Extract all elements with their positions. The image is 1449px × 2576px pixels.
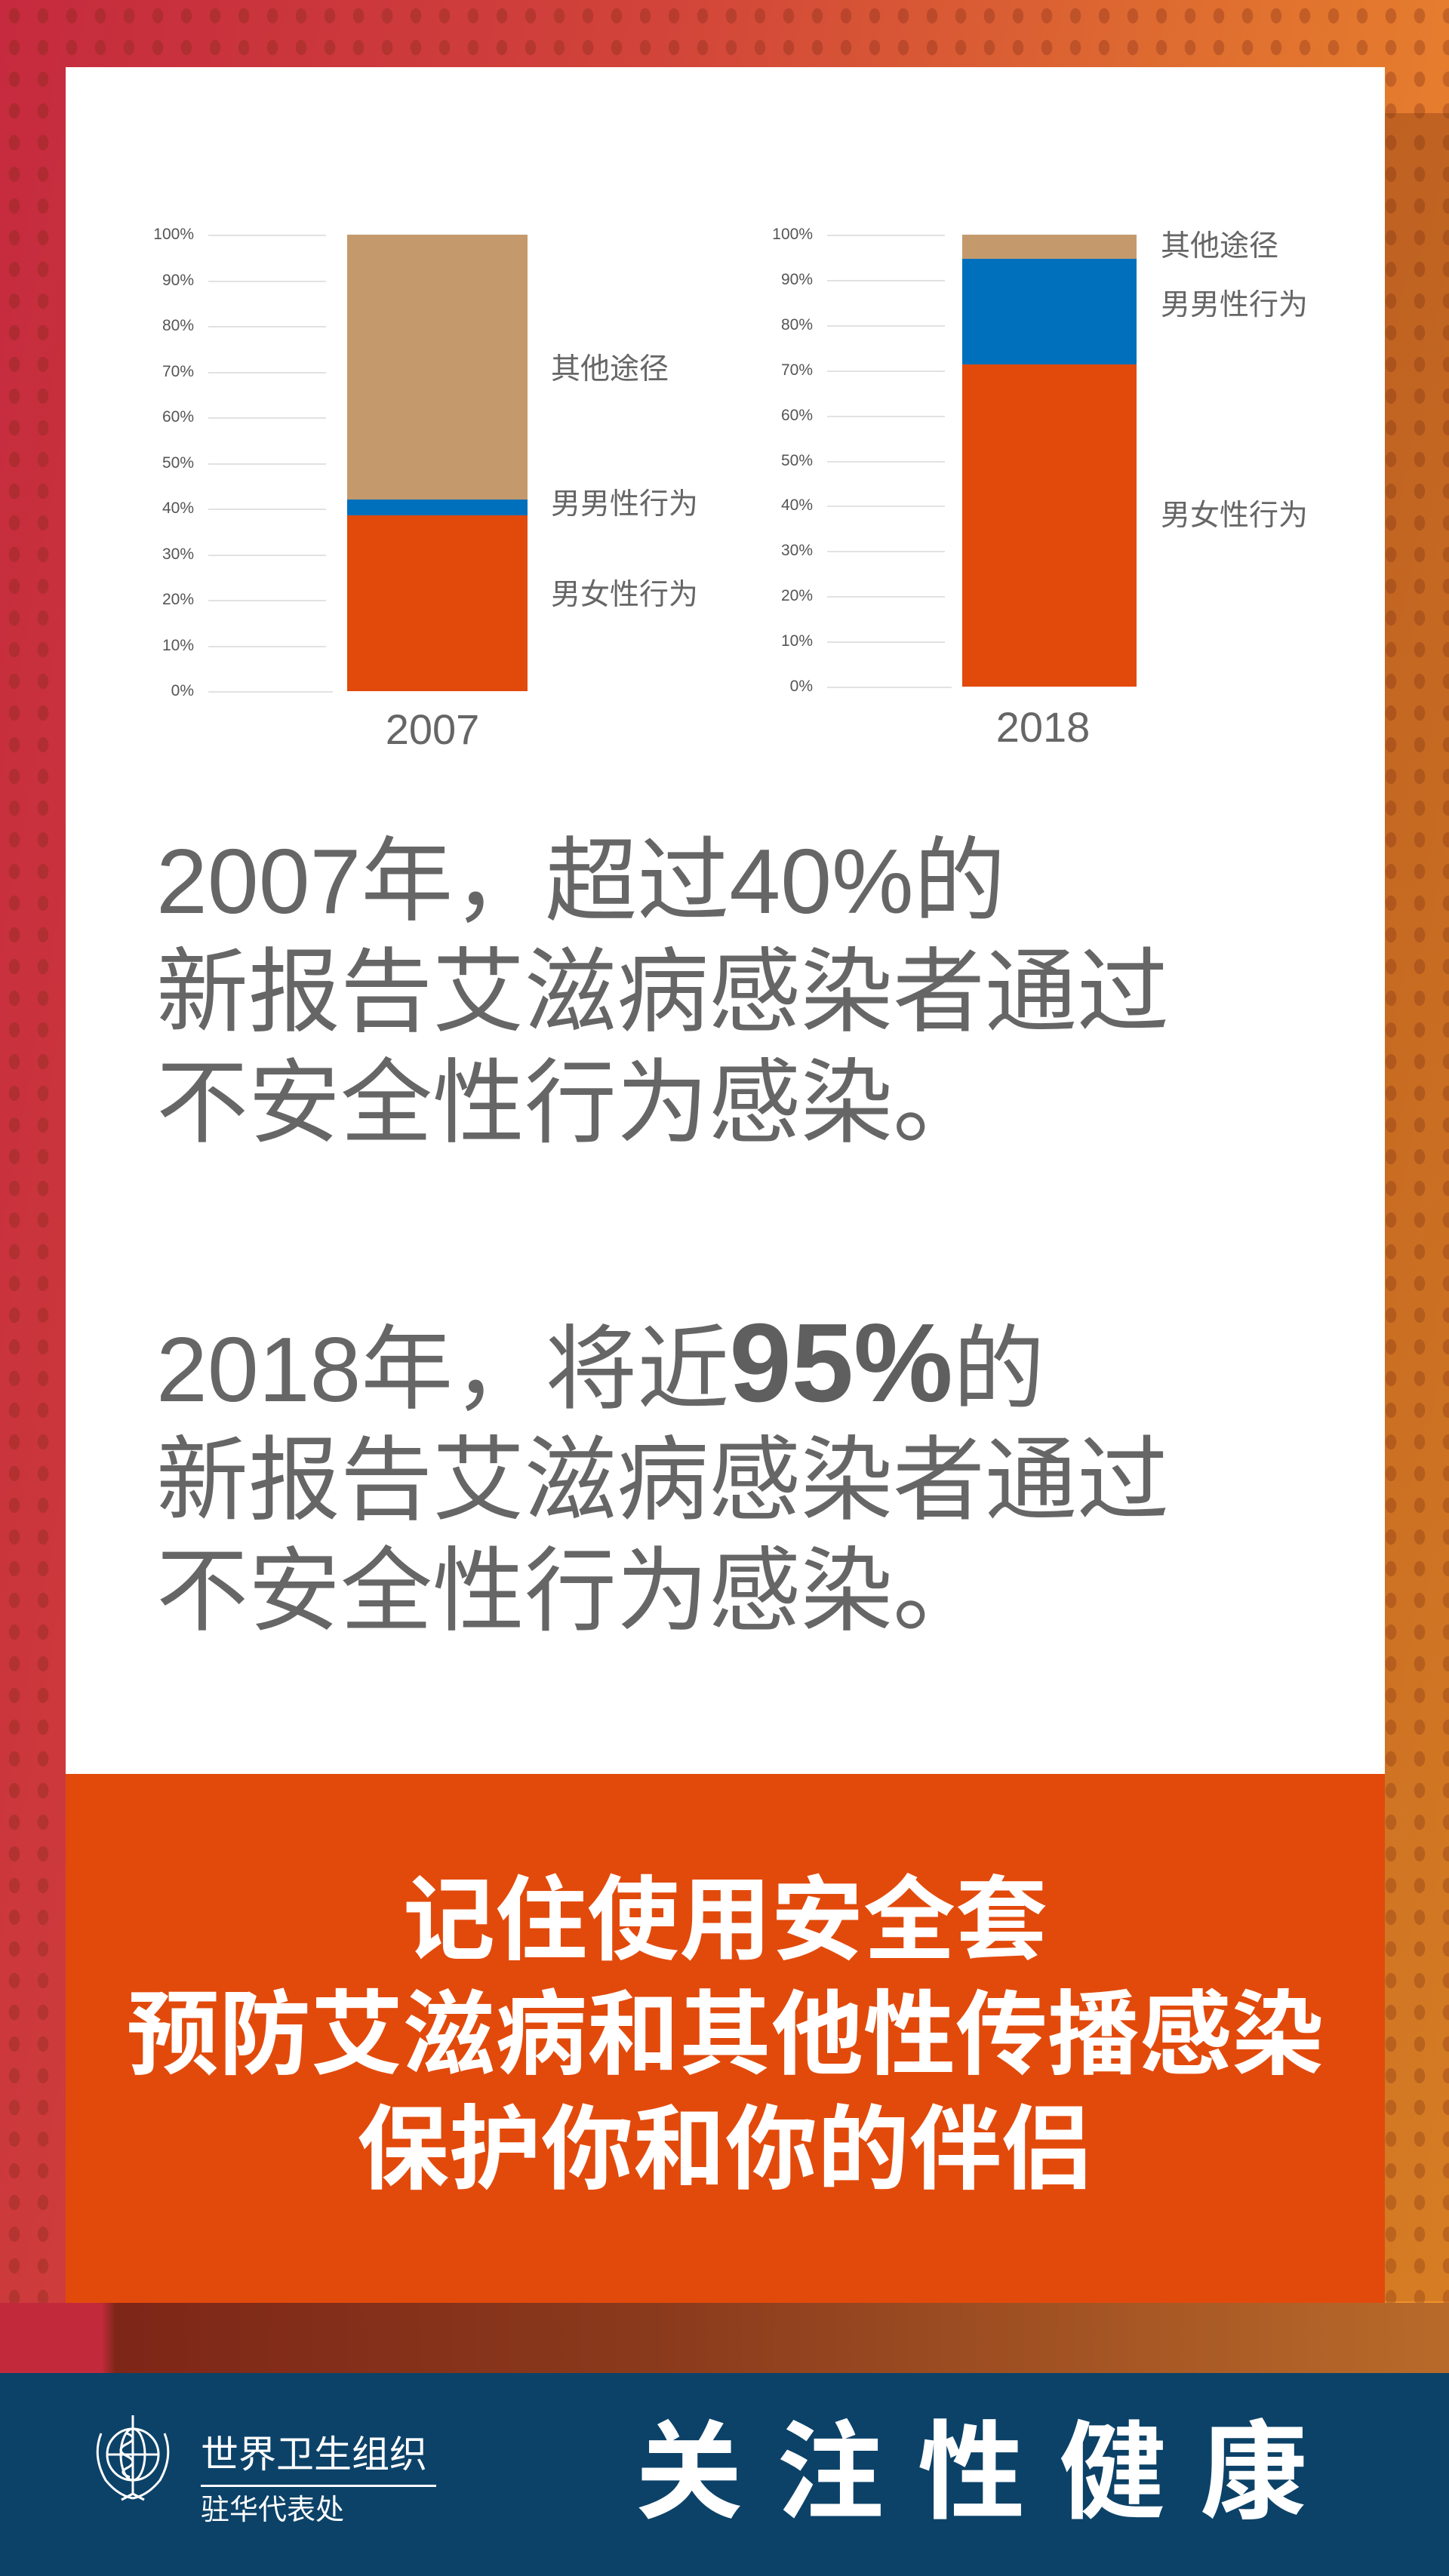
chart: 2018 stacked bar: 0% [790,678,813,695]
chart: 2018 stacked bar: 男男性行为 [1161,289,1308,321]
chart: 2018 stacked bar: 50% [781,452,813,469]
org name [201,2433,436,2526]
banner text: 预防艾滋病和其他性传播感染 [127,1984,1324,2086]
org name: 驻华代表处 [201,2495,344,2526]
footer title: 关注性健康 [635,2413,1341,2533]
chart: 2007 stacked bar: 80% [162,317,194,334]
chart: 2018 stacked bar: 90% [781,271,813,288]
chart: 2007 stacked bar: 男男性行为 [551,488,698,521]
text block: 2018 statement: 新报告艾滋病感染者通过 [156,1429,1169,1532]
chart: 2007 stacked bar: 其他途径 [551,353,669,386]
chart: 2007 stacked bar: 男女性行为 [551,579,698,611]
icon: WHO logo [97,2415,169,2501]
chart: 2018 stacked bar: 10% [781,632,813,650]
chart: 2007 stacked bar: 10% [162,637,194,654]
chart: 2018 stacked bar: 70% [781,361,813,379]
text block: 2007 statement: 不安全性行为感染。 [156,1052,985,1154]
bar 2007 [347,235,528,691]
chart: 2018 stacked bar: 100% [772,226,813,243]
chart: 2018 stacked bar: 40% [781,496,813,514]
org name: 世界卫生组织 [201,2433,427,2476]
chart: 2018 stacked bar: 60% [781,407,813,424]
chart: 2007 stacked bar: 100% [153,226,194,243]
chart: 2007 stacked bar: 2007 [386,705,479,753]
text block: 2007 statement: 新报告艾滋病感染者通过 [156,941,1169,1044]
bar 2018 [962,235,1137,687]
text block: 2007 statement [156,830,1169,1154]
text block: 2018 statement [156,1301,1169,1643]
chart: 2007 stacked bar: 70% [162,363,194,380]
chart: 2018 stacked bar: 其他途径 [1161,230,1278,263]
chart: 2018 stacked bar: 80% [781,316,813,334]
text block: 2018 statement: 2018年，将近95%的 [156,1301,1045,1425]
footer [0,2373,1449,2576]
chart: 2018 stacked bar: 30% [781,542,813,559]
text block: 2007 statement: 2007年，超过40%的 [156,830,1006,933]
banner text: 保护你和你的伴侣 [357,2098,1094,2201]
banner text: 记住使用安全套 [403,1869,1048,1972]
chart: 2007 stacked bar: 60% [162,408,194,426]
chart: 2018 stacked bar: 2018 [996,703,1090,751]
panel: white content panel [66,67,1385,1774]
chart: 2018 stacked bar [772,226,1308,751]
chart: 2018 stacked bar: 男女性行为 [1161,500,1308,532]
chart: 2007 stacked bar: 40% [162,500,194,517]
chart: 2018 stacked bar: 20% [781,587,813,604]
text block: 2018 statement: 不安全性行为感染。 [156,1540,985,1643]
banner text [127,1869,1324,2201]
chart: 2007 stacked bar: 30% [162,546,194,563]
chart: 2007 stacked bar: 50% [162,454,194,472]
chart: 2007 stacked bar: 20% [162,591,194,608]
chart: 2007 stacked bar: 90% [162,272,194,289]
banner: call to action [66,1774,1385,2303]
chart: 2007 stacked bar: 0% [171,682,194,699]
chart: 2007 stacked bar [153,226,698,753]
